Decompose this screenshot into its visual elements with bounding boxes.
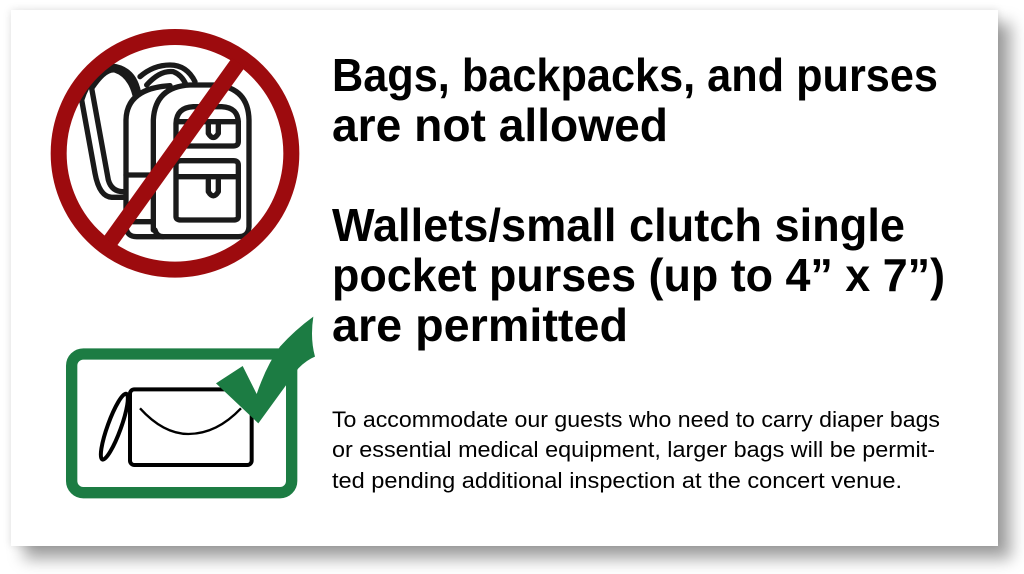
heading: wallets permitted — [332, 199, 945, 351]
heading: wallets permitted: pocket purses (up to 4” x 7”) — [332, 249, 945, 301]
heading: bags not allowed — [332, 49, 938, 151]
heading: bags not allowed: Bags, backpacks, and purses — [332, 49, 938, 101]
text block: accommodation note: ted pending additional inspection at the concert venue. — [332, 468, 902, 493]
text block: accommodation note: or essential medical equipment, larger bags will be permit- — [332, 437, 935, 462]
text block: accommodation note: To accommodate our guests who need to carry diaper bags — [332, 407, 940, 432]
heading: bags not allowed: are not allowed — [332, 99, 668, 151]
text block: accommodation note — [332, 407, 940, 493]
heading: wallets permitted: Wallets/small clutch single — [332, 199, 905, 251]
icon: backpack prohibited — [59, 37, 291, 270]
icon: permitted clutch with check mark — [72, 317, 315, 493]
heading: wallets permitted: are permitted — [332, 299, 628, 351]
